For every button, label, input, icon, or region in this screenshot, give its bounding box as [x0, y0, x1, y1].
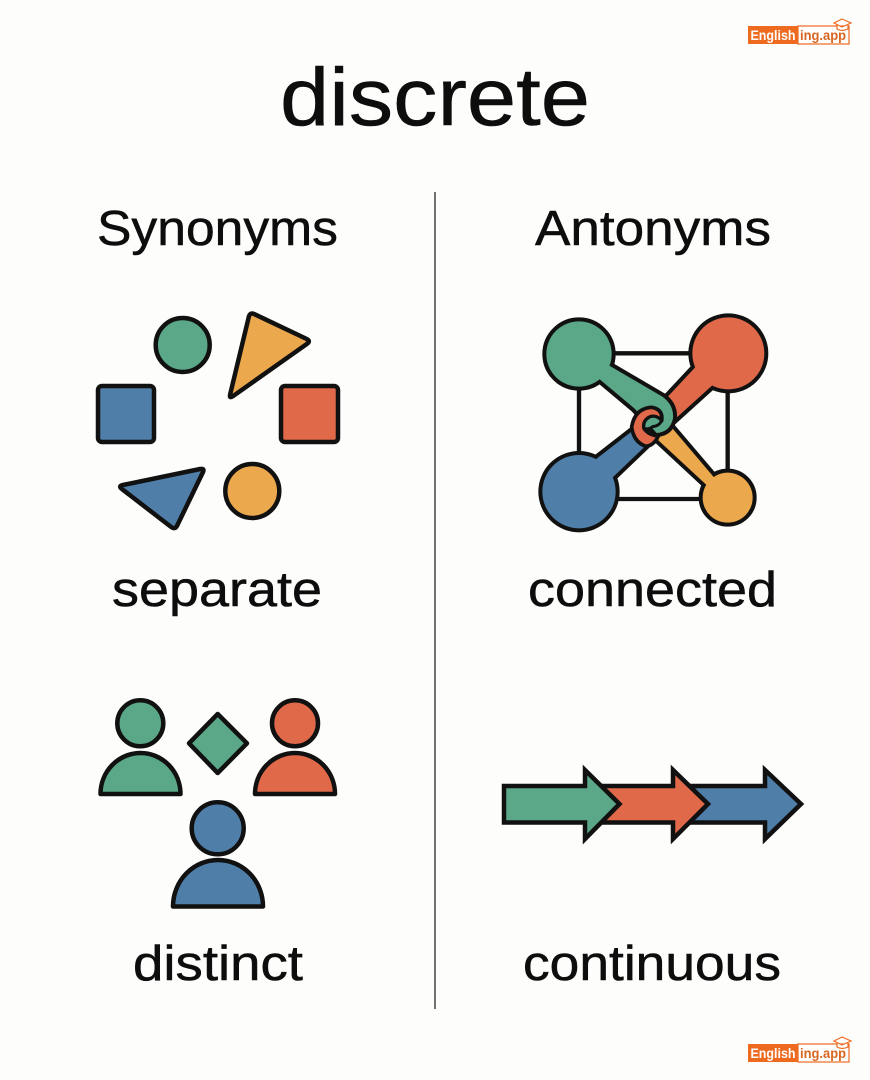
icon: continuous arrows [504, 770, 801, 839]
icon: connected network [542, 317, 764, 528]
title: discrete [280, 52, 590, 143]
logo: bottom: English [750, 1046, 796, 1061]
icon: distinct people [100, 700, 335, 906]
label: continuous: continuous [523, 937, 781, 991]
label: connected: connected [528, 563, 777, 617]
logo: top: English [750, 28, 796, 43]
logo: top: ing.app [800, 28, 846, 43]
heading: synonyms: Synonyms [97, 202, 338, 256]
label: separate: separate [112, 563, 322, 617]
heading: antonyms: Antonyms [535, 202, 771, 256]
label: distinct: distinct [133, 937, 303, 991]
logo: bottom [748, 1037, 851, 1062]
logo: top [748, 19, 851, 44]
icon: separate shapes [98, 314, 338, 528]
logo: bottom: ing.app [800, 1046, 846, 1061]
divider [434, 192, 436, 1009]
